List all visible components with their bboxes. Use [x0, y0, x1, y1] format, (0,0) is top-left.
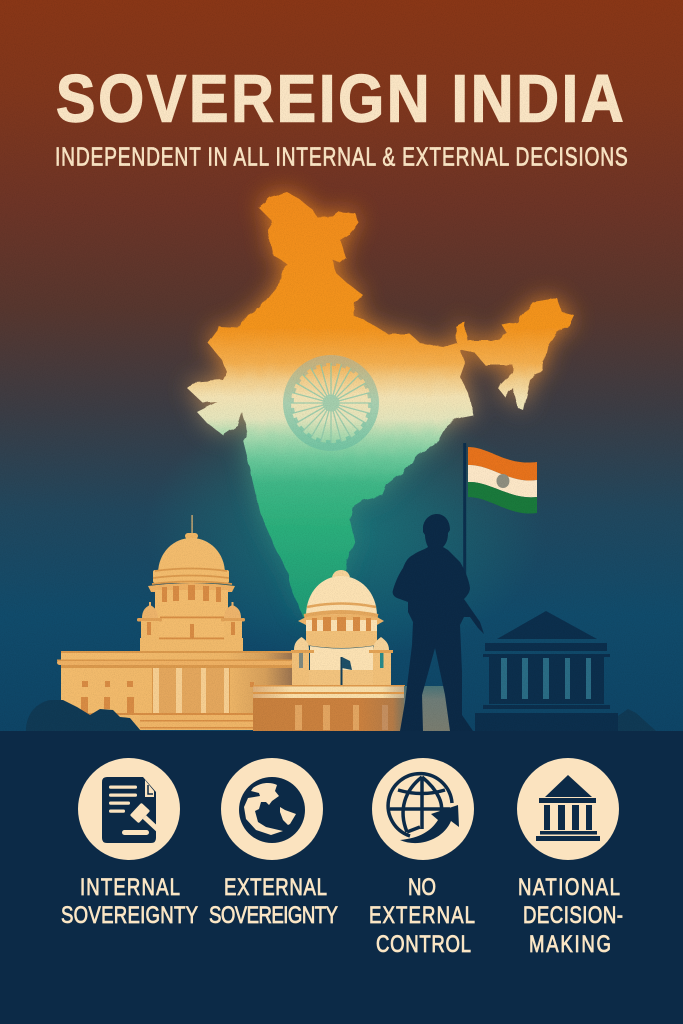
- illustration: small domed building: [253, 570, 405, 731]
- illustration: large parliament building: [57, 515, 293, 730]
- label: national decision-making: [518, 872, 623, 958]
- item: internal sovereignty: [61, 758, 198, 929]
- flag pole: [463, 443, 466, 578]
- subtitle: INDEPENDENT IN ALL INTERNAL & EXTERNAL DECISIONS: [55, 142, 628, 171]
- icon: globe with arrow: [372, 758, 474, 860]
- label: no external control: EXTERNAL: [369, 900, 475, 929]
- label: national decision-making: DECISION-: [523, 900, 623, 929]
- icon: document and gavel: [78, 758, 180, 860]
- icon: institution building: [517, 758, 619, 860]
- title: SOVEREIGN INDIA: [56, 62, 624, 136]
- illustration: courthouse silhouette: [475, 611, 618, 731]
- item: external sovereignty: [209, 758, 338, 929]
- icon: Indian flag: [468, 447, 537, 514]
- label: national decision-making: MAKING: [529, 929, 611, 958]
- background gradient: [0, 0, 683, 732]
- bottom panel: [0, 731, 683, 1024]
- illustration: soldier silhouette: [393, 514, 484, 731]
- illustration: bushes: [26, 700, 656, 731]
- label: external sovereignty: [209, 872, 338, 929]
- label: internal sovereignty: SOVEREIGNTY: [61, 900, 198, 929]
- icon: Ashoka chakra: [287, 359, 375, 447]
- label: no external control: CONTROL: [376, 929, 471, 958]
- label: external sovereignty: EXTERNAL: [224, 872, 327, 901]
- item: national decision-making: [517, 758, 623, 958]
- ground stone behind the soldier: [404, 686, 450, 731]
- label: national decision-making: NATIONAL: [518, 872, 620, 901]
- map of India in tricolour: [187, 192, 574, 617]
- map glow: [187, 192, 574, 617]
- paper grain texture: [0, 0, 683, 731]
- label: external sovereignty: SOVEREIGNTY: [209, 900, 338, 929]
- label: internal sovereignty: INTERNAL: [80, 872, 180, 901]
- teal haze around the southern peninsula: [145, 400, 545, 660]
- label: no external control: [369, 872, 475, 958]
- label: internal sovereignty: [61, 872, 198, 929]
- label: no external control: NO: [408, 872, 436, 901]
- icon: globe with landmasses: [221, 758, 323, 860]
- item: no external control: [369, 758, 475, 958]
